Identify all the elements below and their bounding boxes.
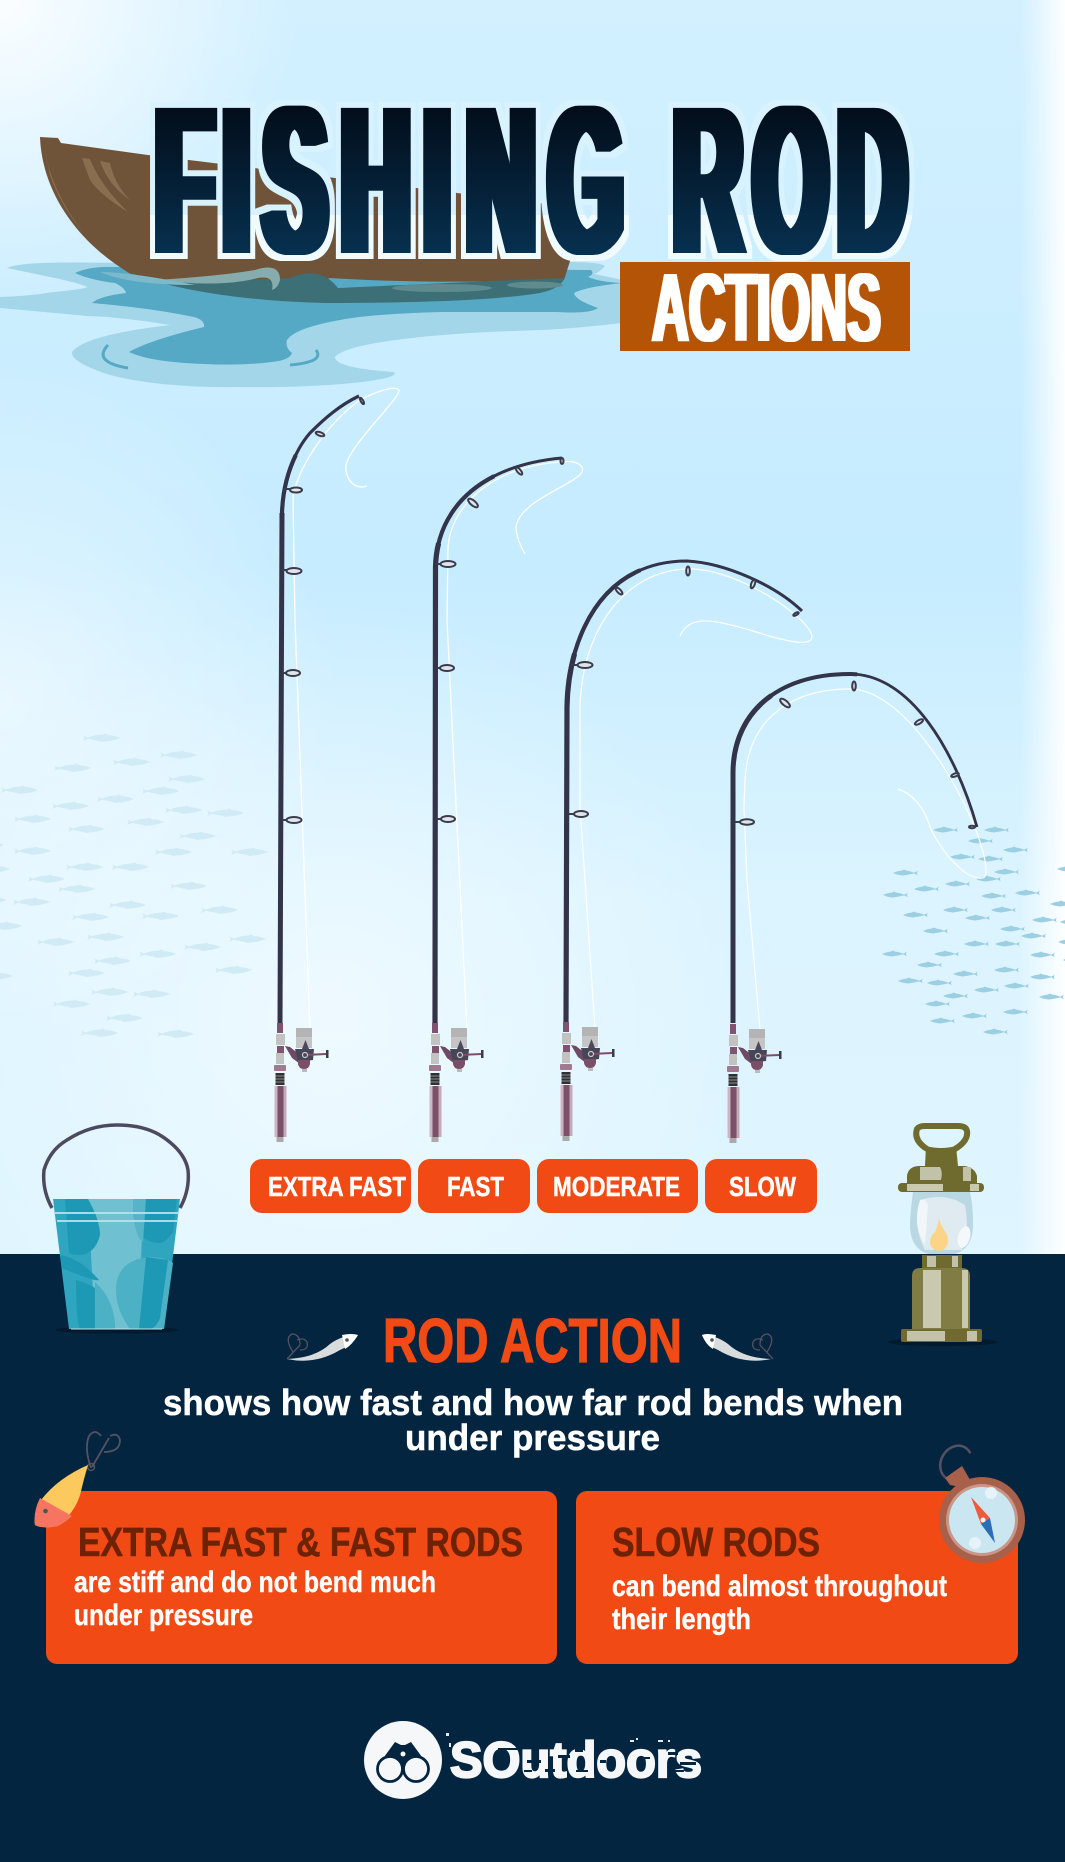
fish school left [0,734,268,1038]
panel: slow rods [576,1491,1018,1664]
subtitle box: ACTIONS [620,253,910,362]
heading text: ROD ACTION [383,1307,682,1376]
logo wordmark: SOutdoors [450,1732,702,1788]
panel text: their length [612,1603,751,1636]
water: mid pool [75,267,622,365]
panel text: can bend almost throughout [612,1570,947,1603]
title: FISHING ROD: FISHING ROD [156,62,906,298]
label: extra fast: EXTRA FAST [268,1171,406,1202]
icon: lure with hook [35,1432,120,1527]
lantern handle [916,1126,967,1149]
label: extra fast [250,1159,411,1213]
water: light outer pool [0,262,622,387]
panel: extra fast and fast rods [46,1491,557,1664]
rod: fast [429,458,583,1142]
panel text: under pressure [74,1599,253,1632]
dark lower band [0,1254,1065,1862]
rod labels [250,1159,817,1213]
rod: extra fast [274,388,399,1142]
panel text [612,1570,947,1636]
rod: moderate [560,561,812,1141]
label: moderate [537,1159,698,1213]
boat wave highlights [156,268,280,290]
icon: compass [934,1440,1025,1563]
lantern cap [907,1166,977,1183]
lantern glass [910,1192,973,1254]
panel heading: EXTRA FAST & FAST RODS [78,1519,523,1565]
logo mark: binoculars [364,1721,442,1799]
logo: SOutdoors [364,1721,702,1799]
label: slow [705,1159,817,1213]
fish school right [882,826,1065,1034]
boat interior shading [44,145,130,235]
background sky [0,0,1065,1260]
panel heading: SLOW RODS [612,1519,820,1565]
label: moderate: MODERATE [553,1171,680,1202]
boat submerged hull [129,273,564,303]
rod: slow [727,674,986,1143]
lantern base [922,1255,962,1268]
icon: right lure [702,1334,773,1361]
icon: lantern [888,1126,998,1346]
boat hull [40,137,571,288]
panel text [74,1566,436,1632]
intro text: under pressure [405,1417,660,1458]
heading: ROD ACTION [287,1307,773,1376]
intro text [163,1382,903,1458]
panel text: are stiff and do not bend much [74,1566,436,1599]
water: ripples [103,345,318,368]
label: slow: SLOW [729,1171,796,1202]
label: fast [418,1159,530,1213]
intro text: shows how fast and how far rod bends when [163,1382,903,1423]
illustration: boat on water [0,137,622,387]
lantern flame [930,1218,948,1251]
label: fast: FAST [447,1171,504,1202]
icon: bucket [44,1125,188,1334]
logo distress marks [446,1733,696,1772]
icon: left lure [287,1334,358,1361]
